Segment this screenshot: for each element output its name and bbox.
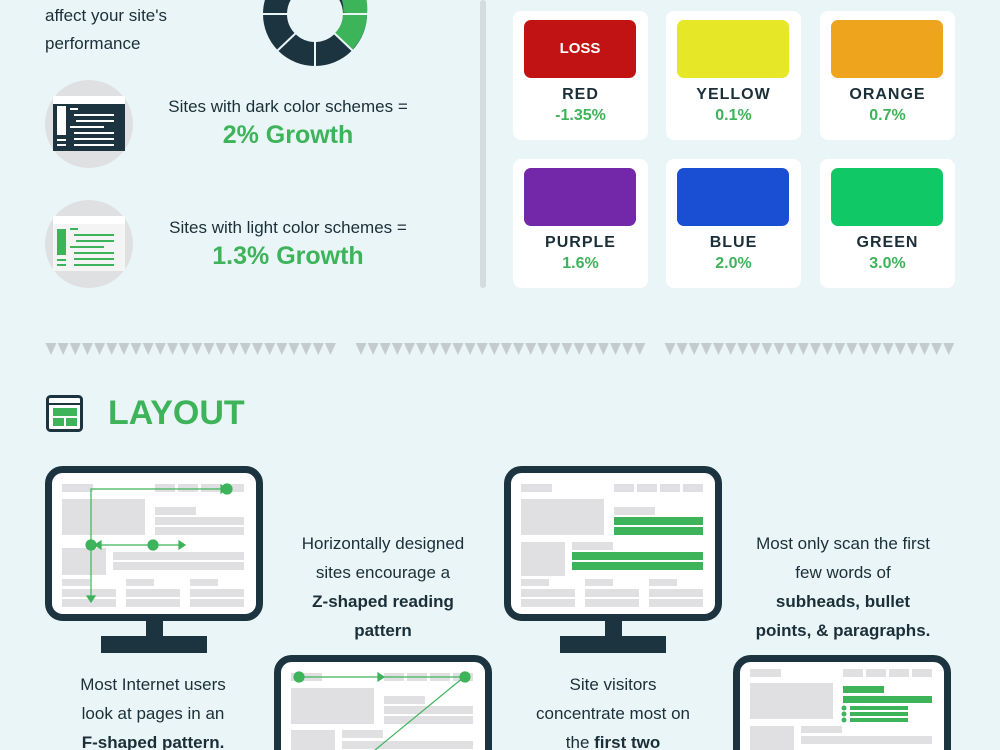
- card: orange: [820, 11, 955, 140]
- card: orange: 0.7%: [869, 107, 906, 124]
- monitor: headings: [504, 466, 722, 653]
- card: yellow: YELLOW: [696, 86, 771, 103]
- card: yellow: [666, 11, 801, 140]
- text: scanning: Most only scan the first: [756, 534, 930, 553]
- donut chart: [263, 0, 368, 66]
- text: Z-pattern: Z-shaped reading: [312, 592, 454, 611]
- card: green: GREEN: [857, 234, 918, 251]
- text: dark scheme: 2% Growth: [223, 121, 353, 149]
- heading: layout: LAYOUT: [108, 394, 245, 432]
- card: red: LOSS: [560, 40, 600, 57]
- card: purple: [513, 159, 648, 288]
- text: dark scheme: [168, 97, 408, 149]
- monitor: F-pattern: [45, 466, 263, 653]
- card: purple: 1.6%: [562, 255, 599, 272]
- card: yellow: 0.1%: [715, 107, 752, 124]
- monitor: Z-pattern: [274, 655, 492, 750]
- text: F-pattern: Most Internet users: [80, 675, 226, 694]
- text: scanning: [756, 534, 930, 640]
- card: red: -1.35%: [555, 107, 606, 124]
- card: blue: BLUE: [710, 234, 757, 251]
- icon: dark scheme: [45, 80, 133, 168]
- text: Z-pattern: Horizontally designed: [302, 534, 464, 553]
- text: Z-pattern: [302, 534, 464, 640]
- card: red: RED: [562, 86, 599, 103]
- text: first two words: [536, 675, 690, 750]
- text: first two words: concentrate most on: [536, 704, 690, 723]
- text: first two words: Site visitors: [570, 675, 656, 694]
- text: light scheme: 1.3% Growth: [212, 242, 364, 270]
- color grid: [513, 11, 955, 288]
- text: Z-pattern: sites encourage a: [316, 563, 450, 582]
- text: F-pattern: [80, 675, 226, 750]
- card: blue: 2.0%: [715, 255, 752, 272]
- text: scanning: subheads, bullet: [776, 592, 910, 611]
- text: scanning: few words of: [795, 563, 891, 582]
- text: F-pattern: look at pages in an: [82, 704, 224, 723]
- text: scanning: points, & paragraphs.: [756, 621, 930, 640]
- card: blue: [666, 159, 801, 288]
- intro text: performance: [45, 34, 140, 53]
- text: Z-pattern: pattern: [354, 621, 412, 640]
- card: green: [820, 159, 955, 288]
- intro text: [45, 6, 167, 53]
- card: orange: ORANGE: [849, 86, 926, 103]
- icon: light scheme: [45, 200, 133, 288]
- text: light scheme: Sites with light color schemes =: [169, 218, 407, 237]
- intro text: affect your site's: [45, 6, 167, 25]
- monitor: scanning: [733, 655, 951, 750]
- text: dark scheme: Sites with dark color schemes =: [168, 97, 408, 116]
- icon: layout: [46, 395, 83, 432]
- card: purple: PURPLE: [545, 234, 616, 251]
- text: light scheme: [169, 218, 407, 270]
- card: red: [513, 11, 648, 140]
- card: green: 3.0%: [869, 255, 906, 272]
